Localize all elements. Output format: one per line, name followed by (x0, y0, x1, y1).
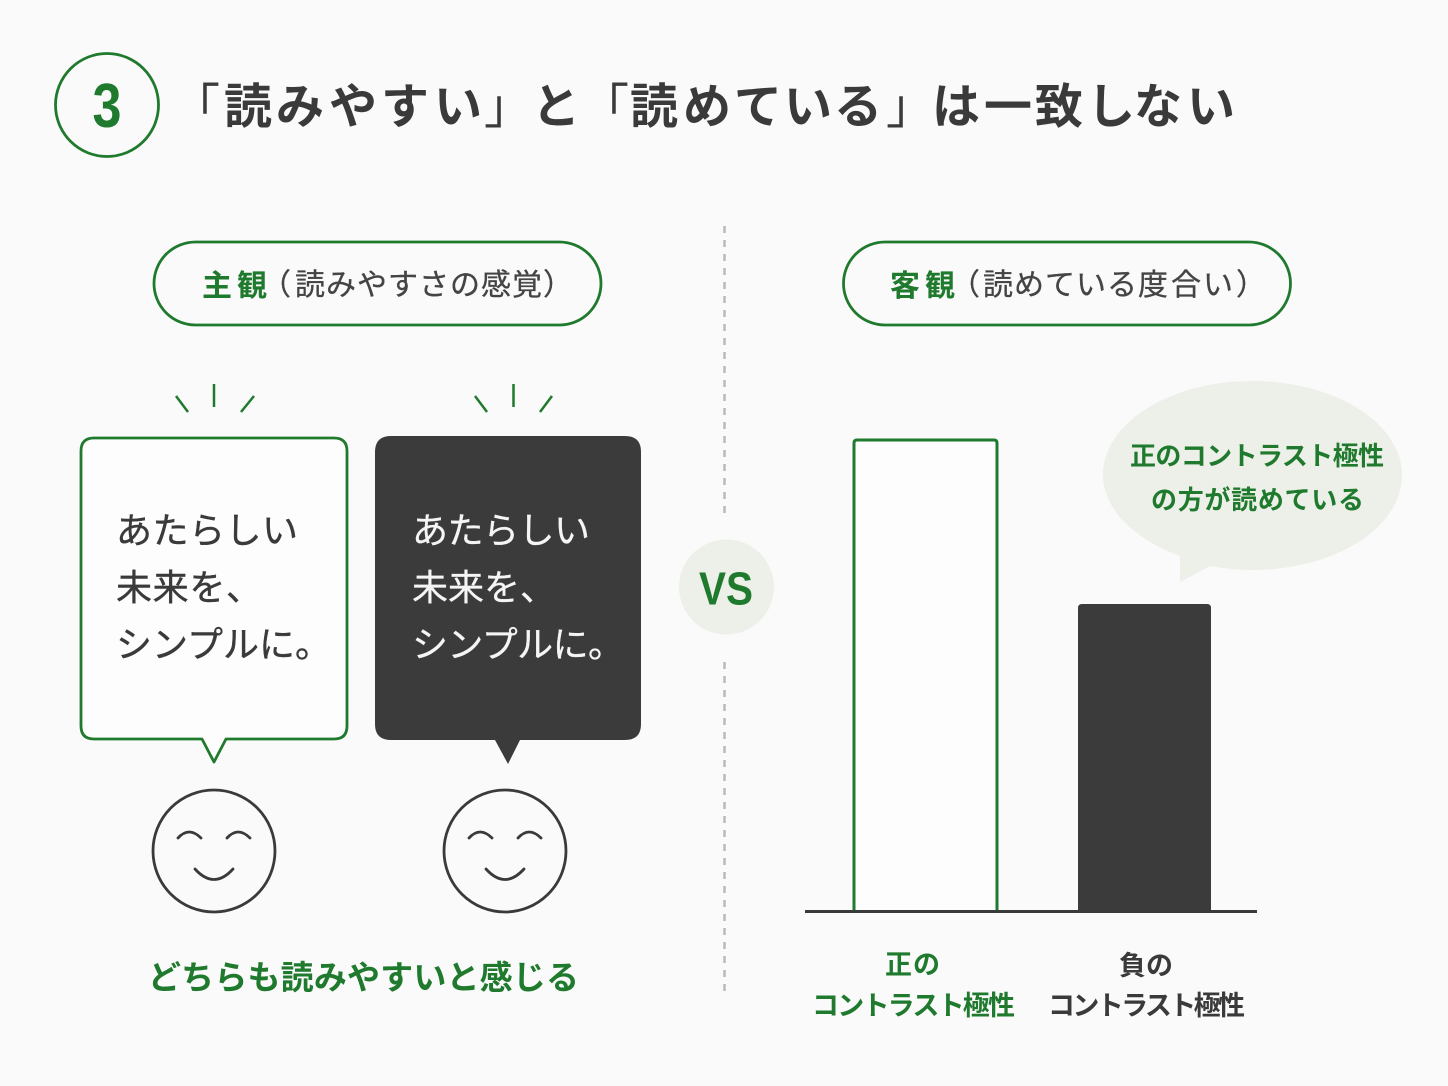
title: 「 (172, 81, 220, 134)
right pill heading: 客観 (890, 270, 955, 303)
label: negative contrast: コントラスト極性 (1048, 991, 1245, 1021)
number badge: 3 (93, 72, 121, 141)
label: negative contrast: 負の (1119, 951, 1173, 981)
speech bubble: positive contrast: シンプルに。 (116, 624, 331, 665)
bar: negative contrast (1078, 604, 1211, 911)
sparkle lines right (475, 384, 552, 412)
right pill heading: （読めている度合い） (950, 269, 1266, 302)
VS badge (679, 540, 774, 634)
label: negative contrast (1048, 951, 1245, 1021)
label: positive contrast: 正の (885, 950, 940, 980)
left pill heading: （読みやすさの感覚） (261, 269, 573, 302)
label: positive contrast (812, 950, 1015, 1021)
icon: smiling face right (444, 790, 566, 912)
speech bubble: positive contrast: あたらしい (116, 510, 298, 551)
sparkle lines left (176, 384, 254, 412)
left pill heading: 主観 (202, 270, 267, 303)
title: は一致しない (932, 81, 1235, 134)
right pill heading (844, 242, 1290, 325)
center divider (723, 226, 726, 992)
callout (1103, 381, 1402, 582)
speech bubble: positive contrast (81, 438, 347, 762)
VS badge: VS (699, 564, 753, 615)
label: positive contrast: コントラスト極性 (812, 991, 1015, 1021)
title: 」 (886, 81, 934, 134)
icon: smiling face left (153, 790, 275, 912)
speech bubble: negative contrast: あたらしい (412, 510, 590, 551)
title: 」 (484, 81, 532, 134)
speech bubble: negative contrast: シンプルに。 (412, 624, 624, 665)
speech bubble: positive contrast: 未来を、 (116, 567, 262, 608)
title: と (532, 81, 580, 134)
title: 読めている (630, 81, 882, 134)
callout: 正のコントラスト極性 (1130, 441, 1384, 471)
chart baseline (805, 910, 1257, 913)
title: 読みやすい (224, 81, 482, 134)
bar chart (805, 440, 1257, 1021)
left conclusion: どちらも読みやすいと感じる (148, 959, 579, 996)
callout: の方が読めている (1151, 485, 1364, 515)
title: 「 (581, 81, 629, 134)
left pill heading (154, 242, 601, 325)
number badge (56, 54, 158, 156)
speech bubble: negative contrast: 未来を、 (412, 567, 556, 608)
bar: positive contrast (854, 440, 997, 911)
speech bubble: negative contrast (375, 436, 641, 764)
